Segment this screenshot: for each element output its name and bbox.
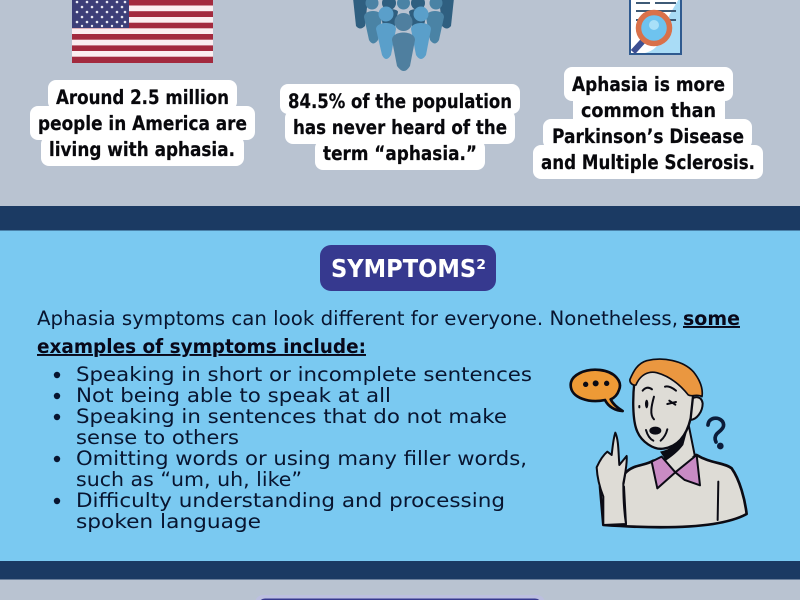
- symptoms list: spoken language: [76, 510, 261, 533]
- head: [633, 363, 693, 449]
- symptoms list: such as “um, uh, like”: [76, 468, 302, 491]
- stat text: living with aphasia.: [49, 138, 235, 161]
- icon: crowd of people: [353, 0, 454, 71]
- stat text: has never heard of the: [293, 116, 507, 139]
- intro paragraph: [37, 307, 740, 358]
- symptoms list: Not being able to speak at all: [76, 384, 391, 407]
- symptoms list: [54, 363, 532, 533]
- heading: symptoms: SYMPTOMS²: [331, 254, 486, 283]
- stat text: people in America are: [38, 112, 247, 135]
- intro paragraph: examples of symptoms include:: [37, 335, 366, 358]
- stat text: Parkinson’s Disease: [552, 125, 744, 148]
- stat text: Aphasia is more: [572, 73, 725, 96]
- stat: prevalence comparison: [533, 67, 763, 179]
- stat text: term “aphasia.”: [323, 142, 477, 165]
- intro paragraph: Aphasia symptoms can look different for everyone. Nonetheless,: [37, 307, 678, 330]
- collar: [652, 455, 700, 488]
- text bubble: [280, 84, 520, 170]
- intro paragraph: some: [683, 307, 740, 330]
- hand: [597, 433, 627, 525]
- hair: [630, 359, 702, 397]
- icon: american flag: [72, 0, 213, 63]
- symptoms list: Speaking in sentences that do not make: [76, 405, 507, 428]
- speech bubble: [571, 370, 623, 411]
- stat text: [288, 90, 512, 165]
- heading: symptoms: [320, 245, 496, 291]
- face: [639, 386, 676, 441]
- stat text: [541, 73, 755, 174]
- stat text: [38, 86, 247, 161]
- ear: [689, 397, 703, 420]
- next section heading button (cropped): [255, 595, 545, 600]
- stat text: 84.5% of the population: [288, 90, 512, 113]
- symptoms list: Difficulty understanding and processing: [76, 489, 505, 512]
- icon: document with magnifying glass: [630, 0, 681, 54]
- symptoms list: sense to others: [76, 426, 239, 449]
- illustration: confused person with speech bubble: [571, 359, 747, 527]
- divider band top: [0, 206, 800, 230]
- body: [600, 455, 747, 527]
- stat text: and Multiple Sclerosis.: [541, 151, 755, 174]
- stat text: common than: [581, 99, 716, 122]
- panel: symptoms: [0, 230, 800, 561]
- sleeve seam: [624, 482, 718, 524]
- neck: [665, 423, 694, 472]
- text bubble: [533, 67, 763, 179]
- question mark: [708, 418, 724, 449]
- symptoms list: Speaking in short or incomplete sentences: [76, 363, 532, 386]
- stat: population awareness: [280, 84, 520, 170]
- divider band bottom: [0, 561, 800, 580]
- text bubble: [30, 80, 255, 166]
- symptoms list: Omitting words or using many filler words,: [76, 447, 527, 470]
- stat text: Around 2.5 million: [56, 86, 229, 109]
- stat: people in America: [30, 80, 255, 166]
